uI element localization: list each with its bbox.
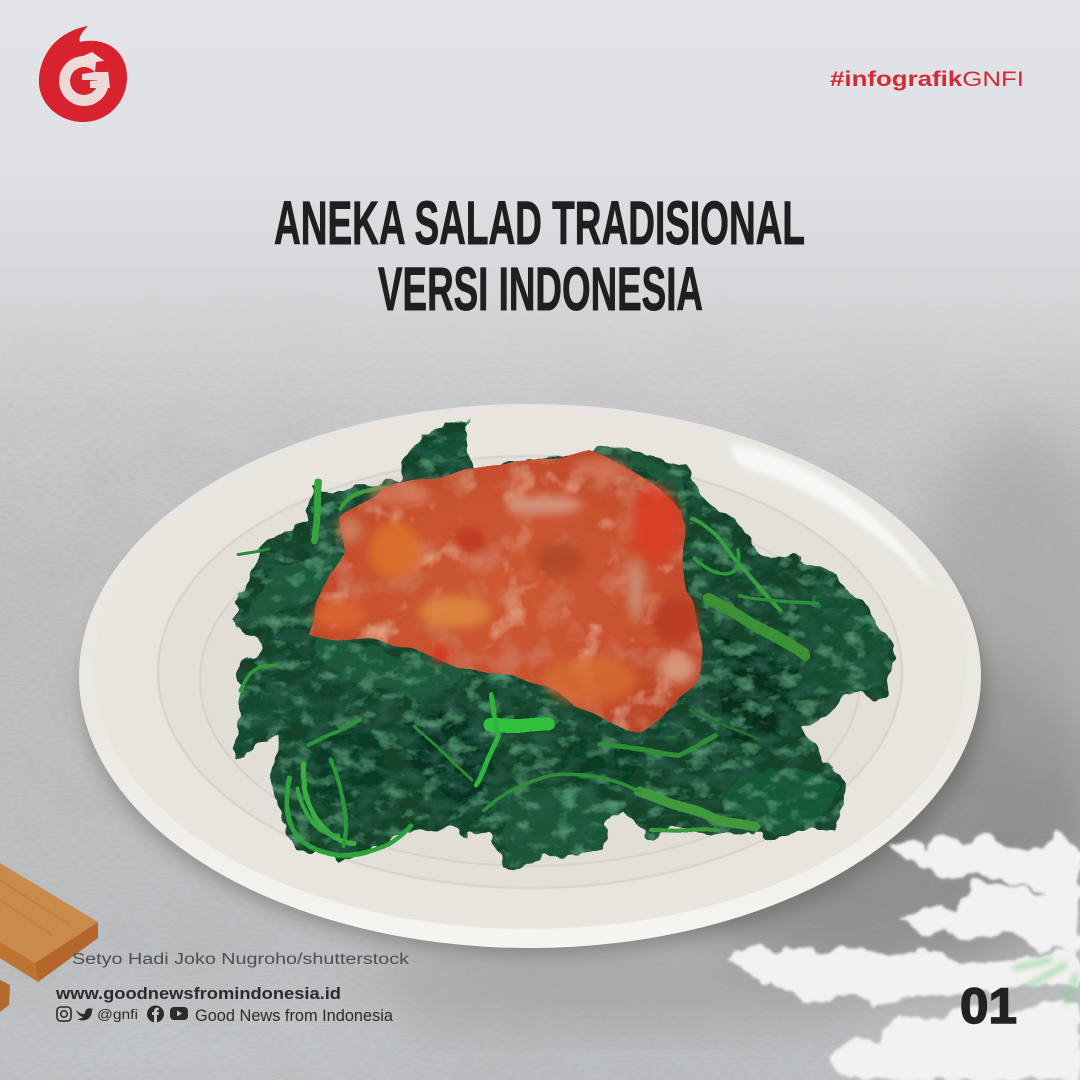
hashtag: #infografik GNFI [830,68,1024,91]
wooden chopstick rest [0,863,98,1012]
footer website and socials: www.goodnewsfromindonesia.id [55,984,341,1003]
leaf mass [226,422,896,866]
footer website and socials: Good News from Indonesia [195,1007,394,1025]
sauce lumps [314,458,696,704]
photo credit: Setyo Hadi Joko Nugroho/shutterstock [72,951,409,968]
bright stems [240,482,820,855]
white lavender sprigs [725,830,1080,1080]
salad greens: water spinach [226,422,896,866]
tomato sambal sauce [308,450,702,734]
title: VERSI INDONESIA [378,255,703,323]
green sprig stem [1015,960,1076,1002]
plate [79,404,984,954]
sprig shapes [725,830,1080,1080]
logo: GNFI [39,26,127,122]
footer website and socials: @gnfi [97,1006,138,1022]
sauce body [308,450,702,734]
title [274,189,805,323]
footer website and socials [55,984,394,1025]
page number: 01 [960,978,1017,1034]
